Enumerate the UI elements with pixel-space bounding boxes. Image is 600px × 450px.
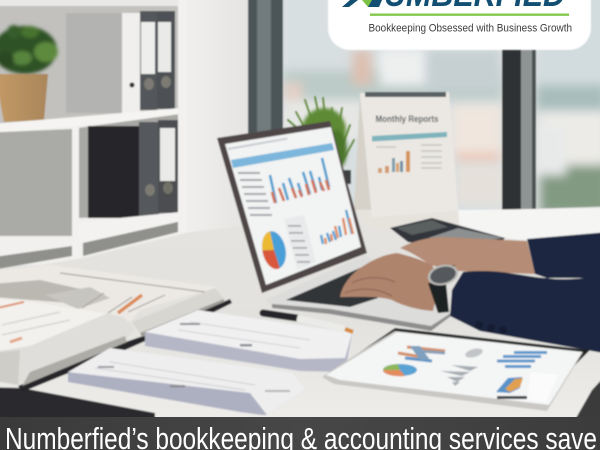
caption band [0,417,600,450]
background: office wall and window [0,0,600,280]
sleeve buttons [475,321,507,334]
logo green underline [370,14,569,16]
dark cover line [18,299,232,392]
dark corner bottom-right [572,360,600,425]
shelf board: lower [0,236,72,258]
window frame: right mullion [502,0,536,210]
far hand [400,237,535,274]
pen [263,313,353,332]
laptop base [266,255,452,328]
front page thick edge [0,313,134,385]
binders: upper shelf [66,11,175,116]
window view: blurred city [280,0,600,220]
shelf board: middle [0,108,180,135]
pie chart [259,229,289,271]
logo panel [328,0,591,50]
tablet area chart [496,377,522,393]
front page surface [0,297,117,356]
open book [0,265,232,392]
book fore-edge: right [132,288,224,333]
tablet with charts [322,328,590,411]
back page [0,265,218,322]
tablet pie chart [383,364,417,376]
calendar title: Monthly Reports [376,114,438,125]
binders: dark lower shelf [88,120,179,218]
screen table [238,172,272,216]
keyboard [286,268,378,307]
shelf back: upper compartment [0,5,178,125]
lower-left compartment [0,129,75,236]
tablet bar chart [398,346,445,361]
screen bar chart: top [270,158,329,203]
screen legend panel [284,215,316,270]
lower-right compartment [78,114,180,218]
shelf divider [72,126,79,266]
tablet triangle chart [440,365,478,386]
calendar text lines [376,144,442,169]
screen blue header [231,143,334,168]
bookshelf [0,0,187,272]
laptop [217,121,452,331]
calculator [390,218,505,244]
near hand [340,253,440,311]
orange text marker: back page [118,295,142,313]
window frame: left mullion [248,0,283,230]
wristwatch [426,262,460,313]
paper stack: front [68,348,305,415]
plant in terracotta pot [0,25,58,122]
potted plant behind laptop [288,97,354,184]
desk calendar: Monthly Reports [354,92,458,229]
near sleeve [450,271,600,356]
dark object bottom-left [0,387,155,425]
calendar mini bars [378,151,410,173]
laptop screen [225,127,361,285]
paper stack: centre [145,310,352,372]
laptop lid [217,121,367,293]
far sleeve [527,231,600,278]
shelf board: top [0,0,180,6]
bright desk zone behind hands [458,208,600,240]
calendar teal header [372,132,447,142]
tablet glare [527,372,558,402]
logo mark: stylised N [342,0,382,7]
book grey text block [0,280,85,303]
desk surface [0,206,600,425]
hands and arms in navy suit [340,231,600,356]
screen bar chart: bottom right [321,210,353,244]
tablet horizontal bars [497,351,547,368]
logo tagline: Bookkeeping Obsessed with Business Growth [368,22,572,34]
tablet small area [464,347,484,359]
